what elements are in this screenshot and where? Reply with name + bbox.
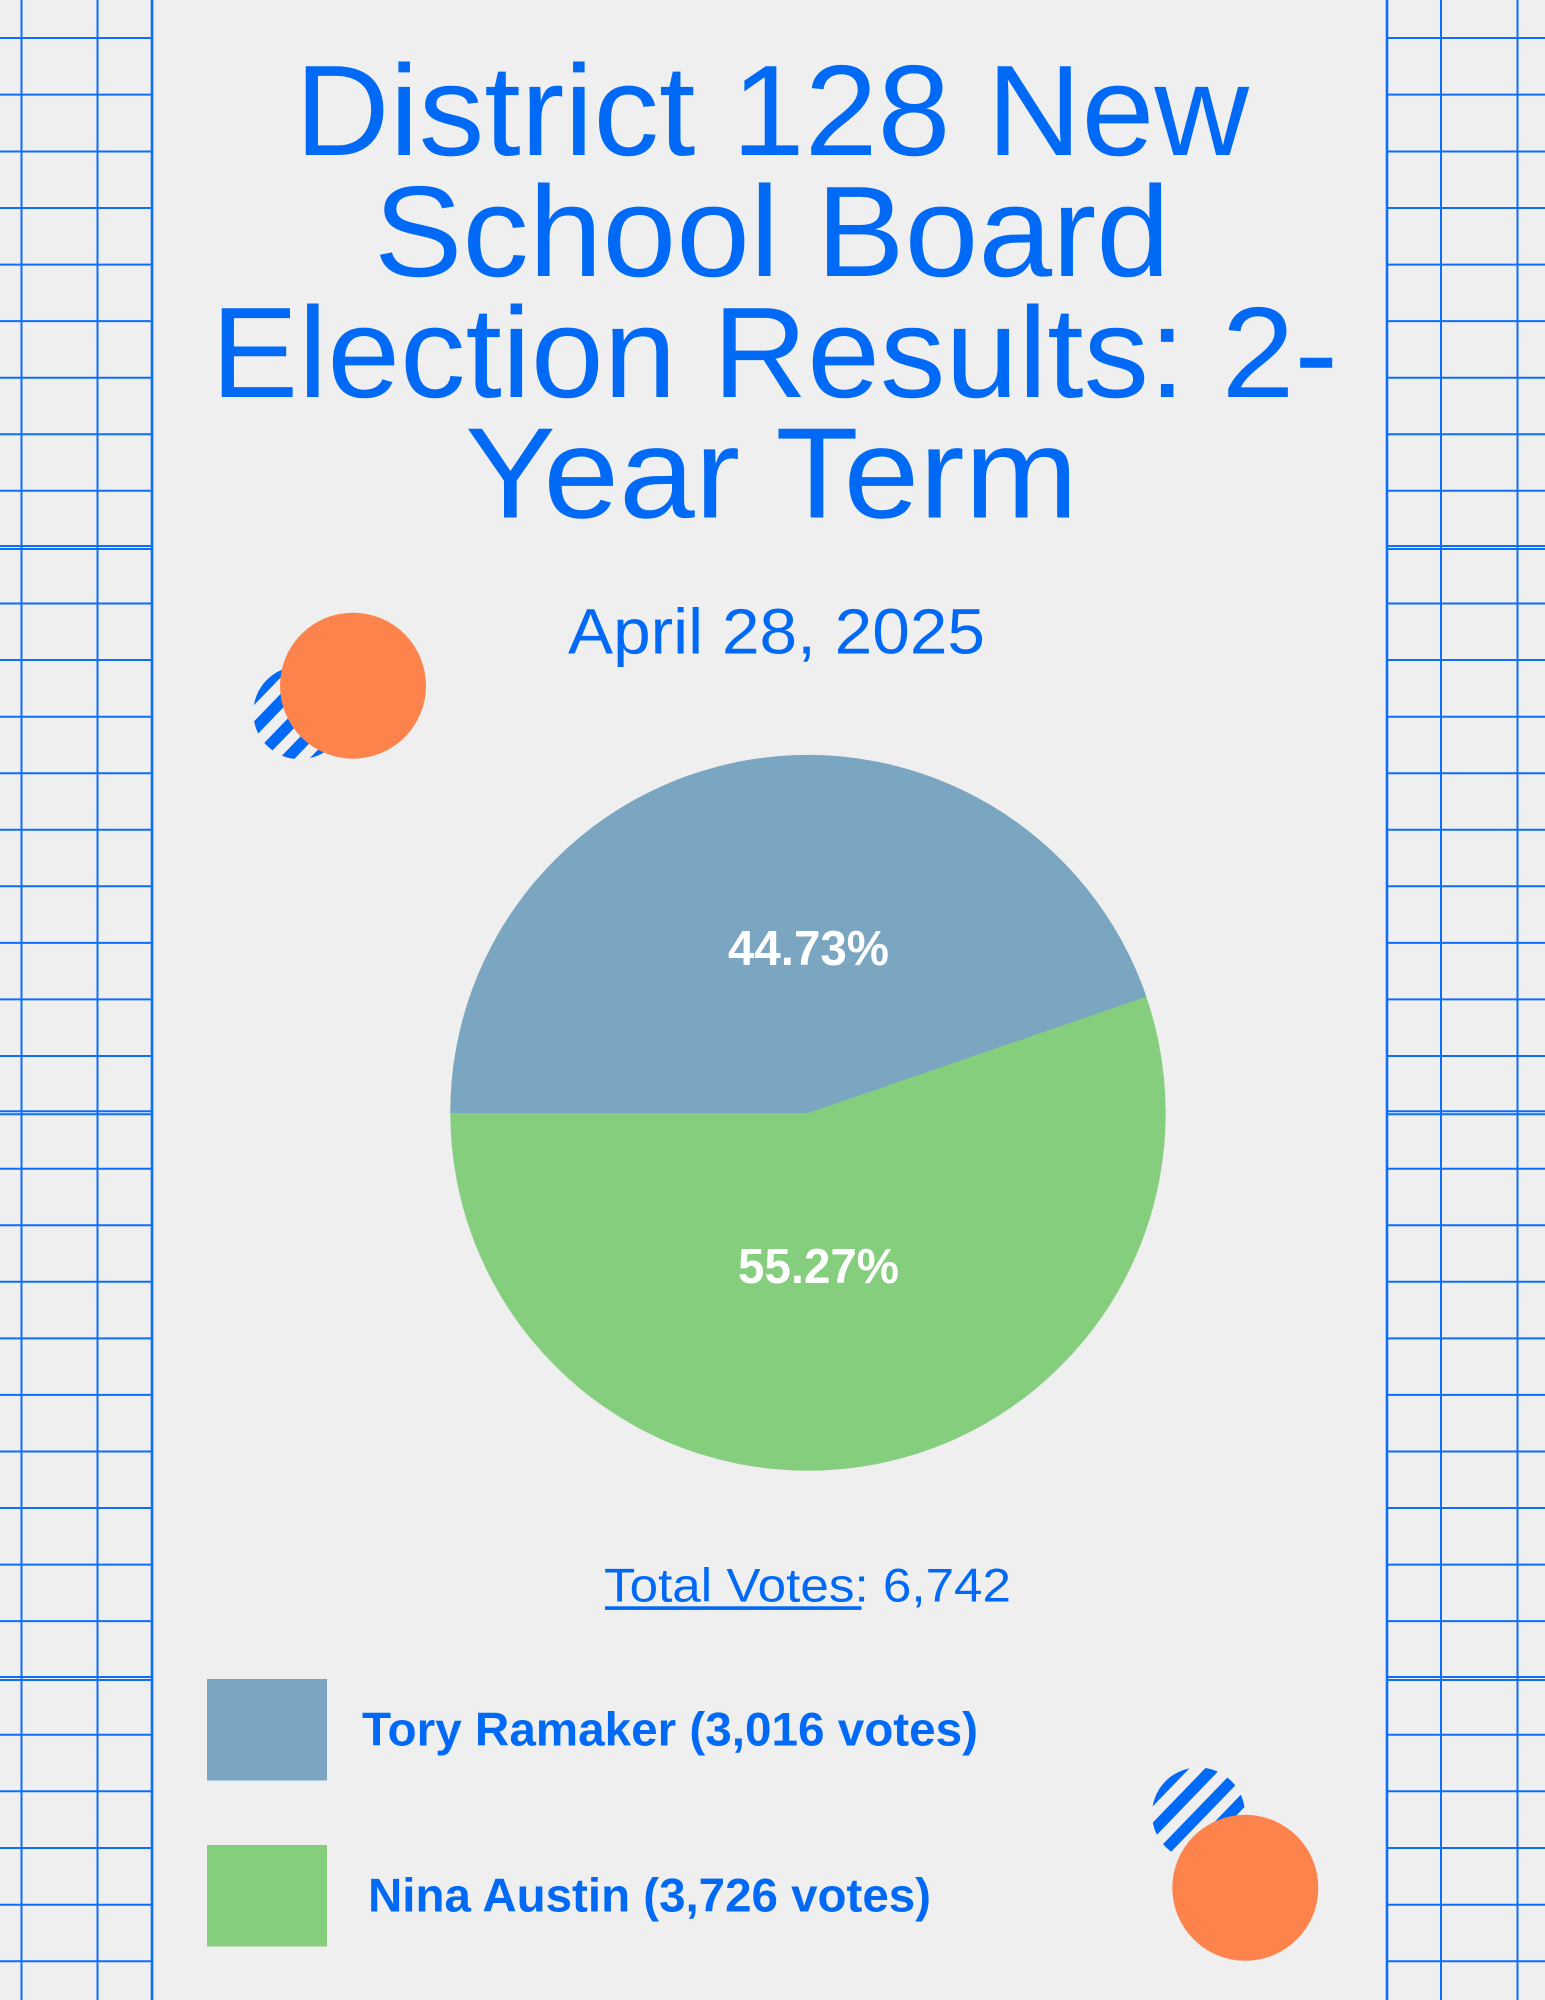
label: 44.73%: 44.73% <box>728 922 889 976</box>
date: April 28, 2025 <box>568 596 985 668</box>
pie chart <box>450 755 1166 1471</box>
title: Year Term <box>465 402 1078 546</box>
title <box>211 39 1338 546</box>
panel: left grid pattern <box>0 0 153 2000</box>
label: 55.27%: 55.27% <box>738 1240 899 1294</box>
title: District 128 New <box>295 39 1250 183</box>
legend: Tory Ramaker <box>207 1679 978 1780</box>
title: Election Results: 2- <box>211 281 1338 425</box>
icon: decorative striped and orange circles, top left <box>254 612 426 759</box>
pie slice: Tory Ramaker 44.73% <box>450 755 1146 1113</box>
legend: Nina Austin <box>207 1845 931 1946</box>
title: School Board <box>374 160 1170 304</box>
total votes: Total Votes: 6,742 <box>604 1560 1011 1612</box>
pie slice: Nina Austin 55.27% <box>450 755 1166 1471</box>
panel: right grid pattern <box>1386 0 1545 2000</box>
legend: Tory Ramaker: Tory Ramaker (3,016 votes) <box>362 1704 978 1756</box>
legend: Nina Austin: Nina Austin (3,726 votes) <box>368 1870 931 1922</box>
icon: decorative striped and orange circles, bottom right <box>1152 1768 1318 1961</box>
